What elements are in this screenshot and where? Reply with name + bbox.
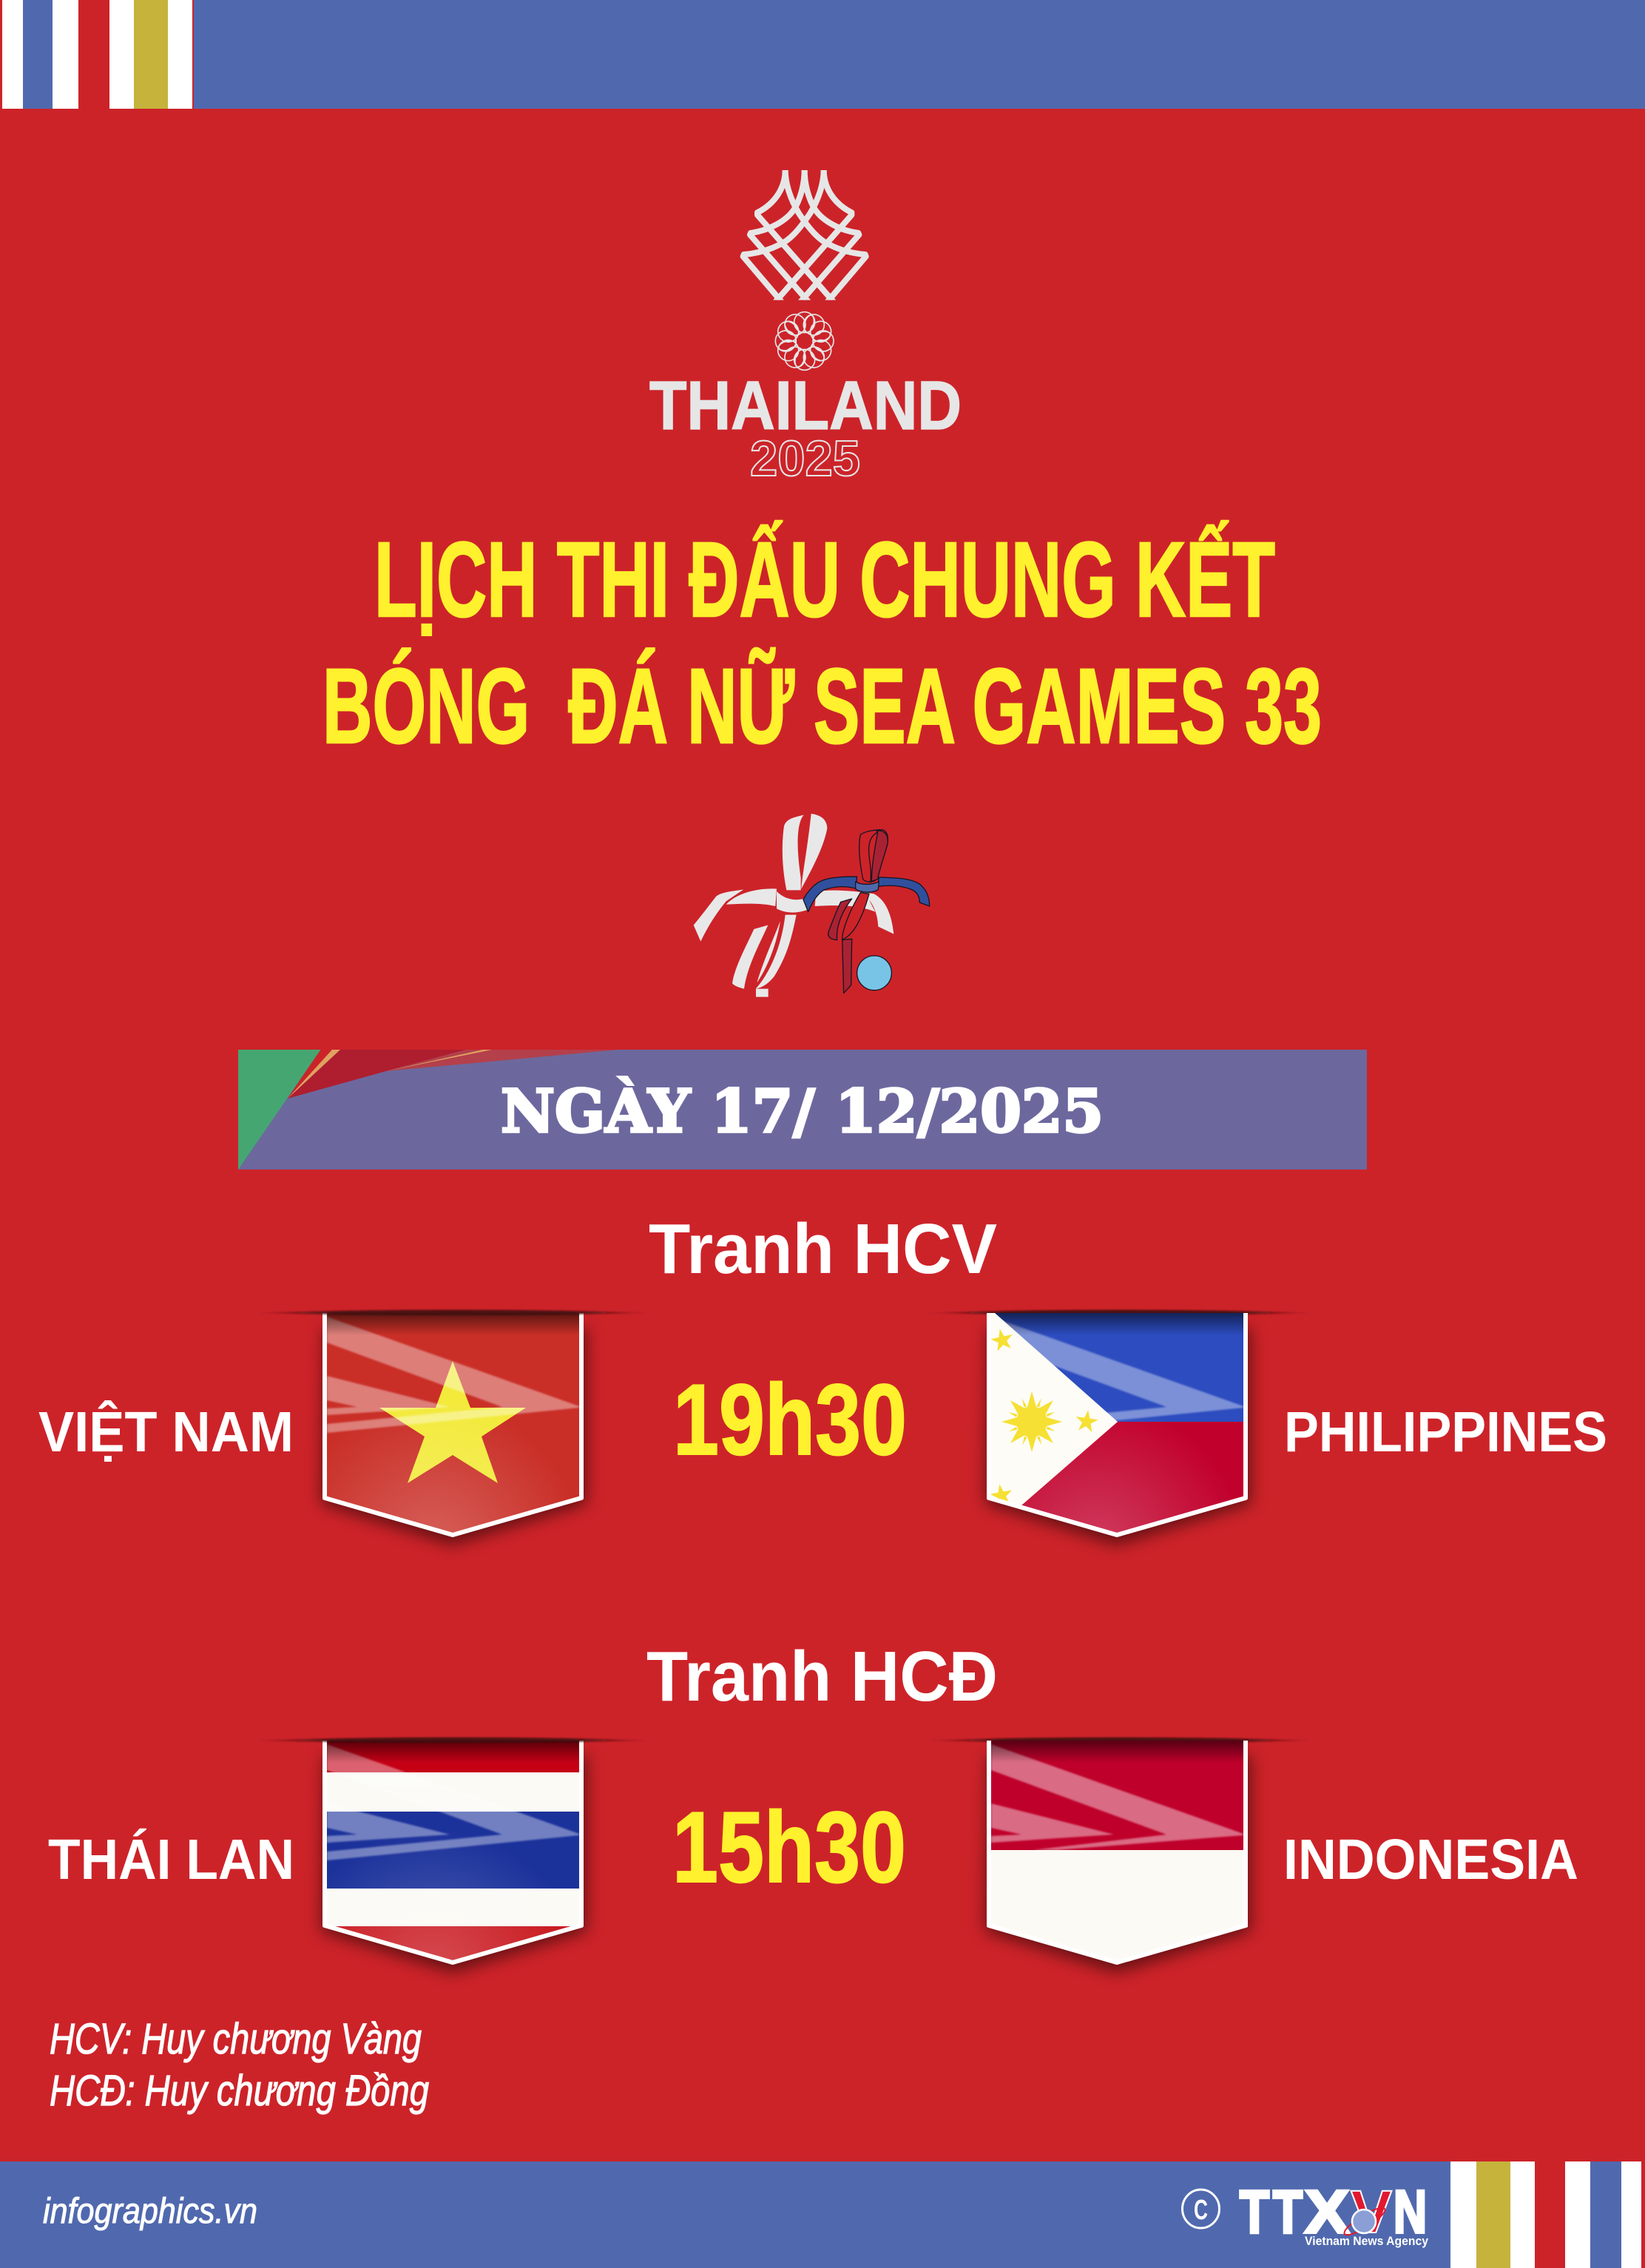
flag: Indonesia	[985, 1741, 1251, 1973]
legend: abbreviations	[50, 2015, 429, 2115]
kick-off time: gold medal match: 19h30	[673, 1363, 907, 1476]
red and blue ribbon figure	[803, 830, 930, 993]
icon: lotus flower	[774, 311, 835, 371]
legend: abbreviations: HCV: Huy chương Vàng	[50, 2015, 422, 2063]
TTXVN logo: T	[1240, 2178, 1269, 2246]
team name: Thailand: THÁI LAN	[48, 1827, 294, 1891]
icon: ball	[857, 956, 891, 990]
heading: gold medal match: Tranh HCV	[649, 1209, 997, 1289]
kick-off time: bronze medal match: 15h30	[672, 1791, 906, 1903]
logo: SEA Games Thailand 2025	[649, 170, 962, 487]
agency caption: Vietnam News Agency	[1305, 2234, 1428, 2248]
white ribbon figure	[694, 814, 894, 997]
icon: copyright mark	[1182, 2190, 1219, 2228]
legend: abbreviations: HCĐ: Huy chương Đồng	[50, 2067, 429, 2115]
TTXVN logo	[1240, 2178, 1428, 2248]
icon: ribbon footballer mascot	[694, 814, 930, 997]
TTXVN logo: T	[1273, 2178, 1303, 2246]
icon: copyright mark: C	[1194, 2195, 1208, 2226]
shelf shadow above bronze medal flags	[251, 1737, 1317, 1743]
flag: Thailand	[321, 1741, 587, 1973]
flag: Vietnam	[321, 1313, 587, 1545]
icon: sun and stars	[988, 1326, 1100, 1507]
team name: Vietnam: VIỆT NAM	[38, 1400, 294, 1464]
top stripe band	[2, 0, 1645, 109]
icon: temple roof emblem	[743, 170, 866, 302]
date banner	[238, 1050, 1367, 1170]
TTXVN logo: N	[1394, 2178, 1427, 2246]
flag: Philippines	[985, 1313, 1251, 1545]
title	[322, 520, 1322, 766]
logo wordmark: THAILAND	[649, 367, 962, 444]
date text: NGÀY 17/ 12/2025	[501, 1076, 1104, 1146]
TTXVN logo: V	[1351, 2178, 1392, 2246]
logo year: 2025	[750, 431, 860, 487]
heading: bronze medal match: Tranh HCĐ	[646, 1637, 998, 1716]
icon: globe with orbit	[1342, 2204, 1388, 2239]
shelf shadow above gold medal flags	[251, 1309, 1317, 1315]
TTXVN logo: X	[1305, 2178, 1349, 2246]
footer band	[0, 2161, 1645, 2268]
team name: Indonesia: INDONESIA	[1283, 1828, 1578, 1891]
team name: Philippines: PHILIPPINES	[1284, 1400, 1607, 1464]
footer site name: infographics.vn	[43, 2192, 257, 2231]
